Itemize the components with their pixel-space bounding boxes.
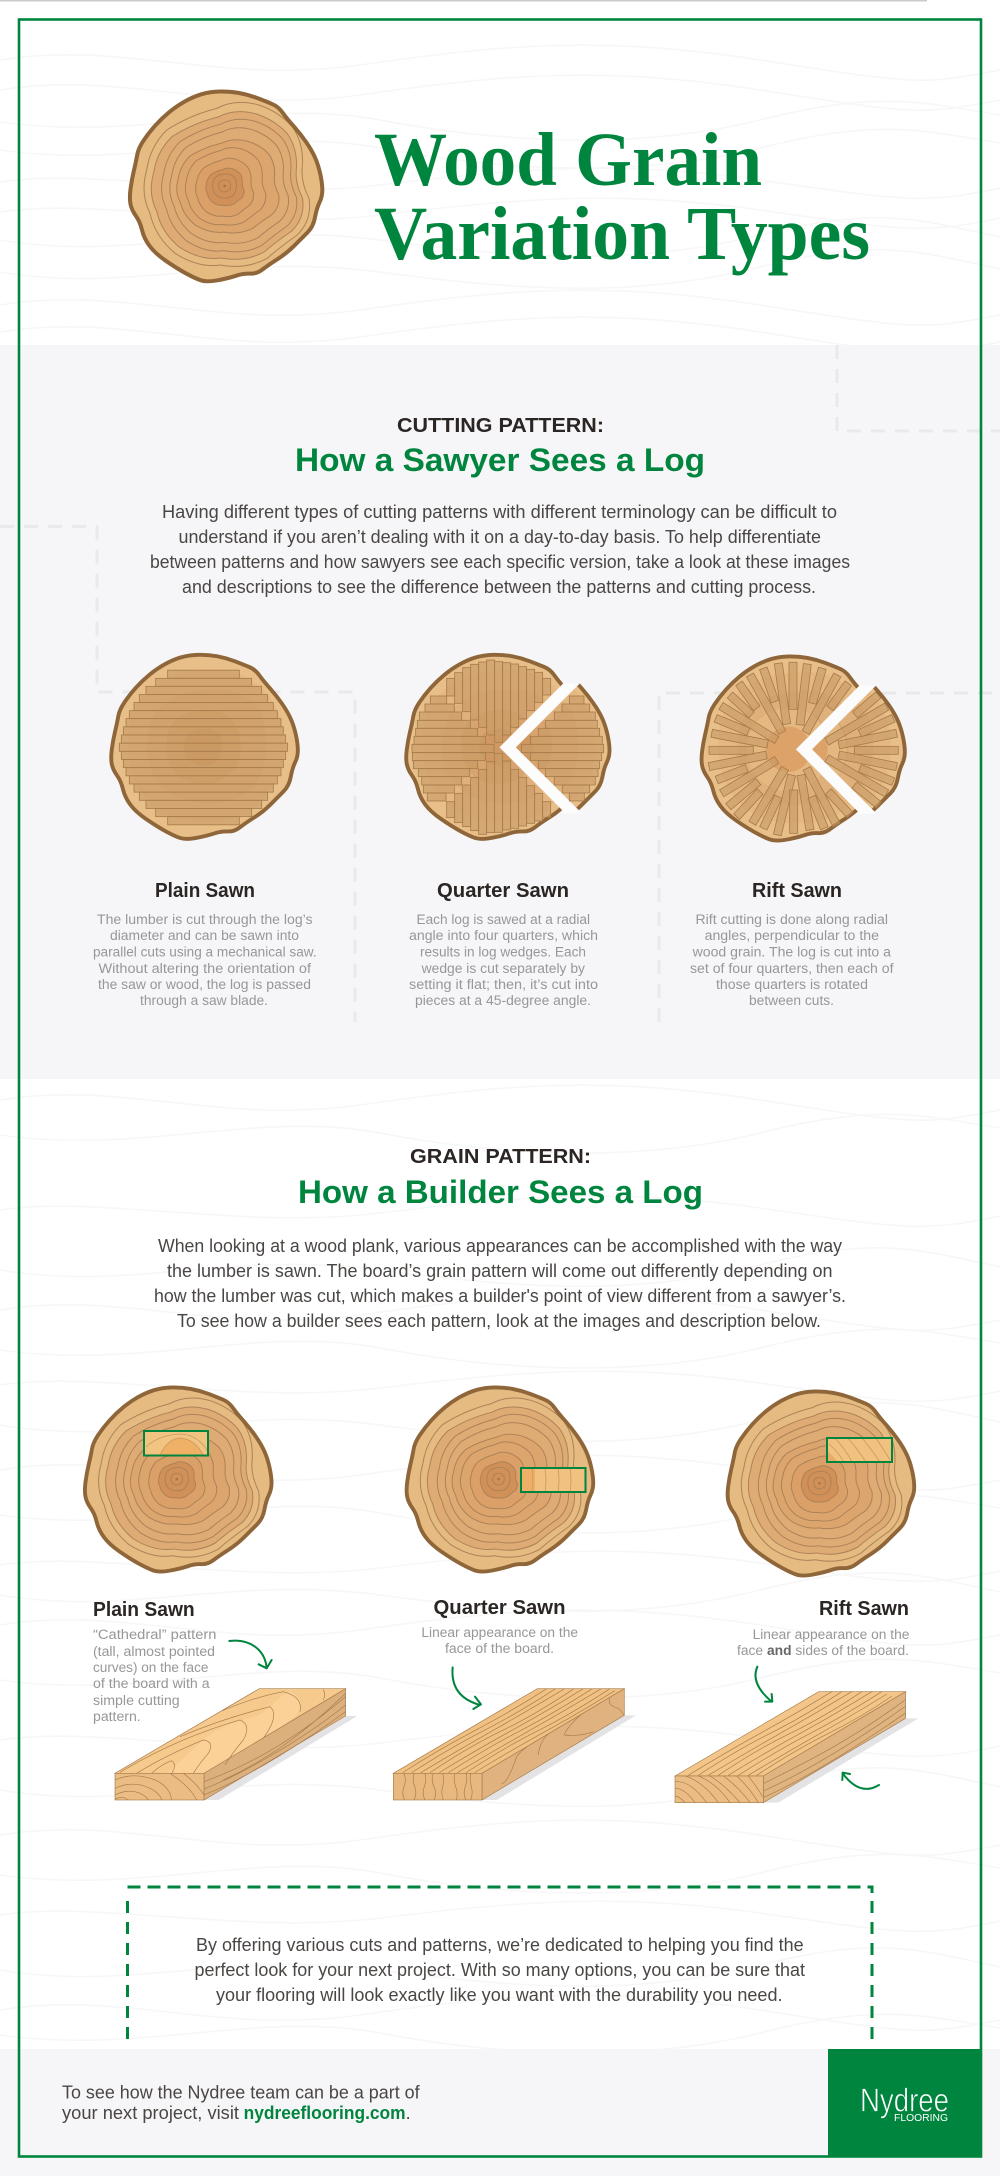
title: Variation Types bbox=[374, 192, 870, 276]
heading and description: quarter sawn grain: Quarter Sawn bbox=[434, 1597, 566, 1619]
text: grain pattern introduction: how the lumber was cut, which makes a builder's point of view different from a sawyer’s. bbox=[154, 1286, 846, 1306]
heading and description: rift sawn cutting: angles, perpendicular to the bbox=[705, 928, 879, 943]
callout: closing message box bbox=[128, 1887, 872, 2042]
heading and description: quarter sawn cutting: pieces at a 45-degree angle. bbox=[415, 993, 591, 1008]
heading and description: rift sawn cutting: Rift Sawn bbox=[752, 880, 842, 902]
heading and description: rift sawn cutting bbox=[690, 880, 894, 1008]
heading and description: quarter sawn cutting bbox=[409, 880, 598, 1008]
heading and description: quarter sawn cutting: Quarter Sawn bbox=[437, 880, 569, 902]
logo: Nydree Flooring: FLOORING bbox=[894, 2113, 948, 2124]
heading and description: plain sawn cutting: Plain Sawn bbox=[155, 880, 255, 902]
heading and description: plain sawn cutting: through a saw blade. bbox=[140, 993, 268, 1008]
logo: Nydree Flooring bbox=[828, 2049, 982, 2158]
icon: quarter sawn log with highlighted board bbox=[407, 1387, 593, 1572]
footer call to action: your next project, visit bbox=[62, 2103, 239, 2123]
section: cutting pattern heading: CUTTING PATTERN: bbox=[397, 415, 604, 437]
heading and description: quarter sawn cutting: wedge is cut separately by bbox=[421, 961, 585, 976]
icon: title log cross-section bbox=[130, 91, 322, 281]
icon: plain sawn log with highlighted board bbox=[85, 1387, 272, 1572]
icon: rift sawn log with highlighted board bbox=[728, 1391, 914, 1576]
chart: plain sawn cutting diagram bbox=[111, 655, 298, 839]
text: cutting pattern introduction: between patterns and how sawyers see each specific version, take a look at these images bbox=[150, 552, 850, 572]
heading and description: plain sawn cutting: The lumber is cut through the log’s bbox=[97, 912, 313, 927]
heading and description: rift sawn cutting: between cuts. bbox=[749, 993, 834, 1008]
heading and description: plain sawn cutting: the saw or wood, the log is passed bbox=[98, 977, 311, 992]
heading and description: rift sawn cutting: wood grain. The log is cut into a bbox=[692, 945, 892, 960]
chart: quarter sawn cutting diagram bbox=[406, 655, 610, 839]
board: rift sawn bbox=[675, 1667, 918, 1803]
title: Wood Grain bbox=[374, 118, 762, 202]
heading and description: quarter sawn cutting: results in log wedges. Each bbox=[420, 945, 586, 960]
title bbox=[374, 118, 870, 276]
heading and description: plain sawn grain: Plain Sawn bbox=[93, 1599, 195, 1621]
heading and description: plain sawn grain: “Cathedral” pattern bbox=[93, 1627, 216, 1642]
footer call to action: nydreeflooring.com bbox=[244, 2103, 406, 2123]
heading and description: plain sawn cutting: diameter and can be sawn into bbox=[110, 928, 299, 943]
board: quarter sawn bbox=[393, 1667, 636, 1800]
panel: cutting pattern background bbox=[0, 345, 1000, 1079]
heading and description: plain sawn cutting bbox=[93, 880, 317, 1008]
footer call to action: To see how the Nydree team can be a part of bbox=[62, 2083, 421, 2103]
logo: Nydree Flooring: Nydree bbox=[860, 2082, 949, 2119]
callout: closing message box: By offering various cuts and patterns, we’re dedicated to helping you find the bbox=[196, 1935, 804, 1955]
heading and description: quarter sawn cutting: angle into four quarters, which bbox=[409, 928, 598, 943]
heading and description: rift sawn grain: Linear appearance on the bbox=[753, 1627, 909, 1642]
section: grain pattern heading bbox=[298, 1146, 703, 1210]
board: plain sawn bbox=[115, 1641, 357, 1800]
heading and description: rift sawn grain: face and sides of the board. bbox=[737, 1643, 909, 1658]
text: grain pattern introduction: the lumber is sawn. The board’s grain pattern will come out differently depending on bbox=[167, 1261, 832, 1281]
text: grain pattern introduction bbox=[154, 1236, 846, 1331]
heading and description: rift sawn cutting: Rift cutting is done along radial bbox=[696, 912, 888, 927]
callout: closing message box: your flooring will look exactly like you want with the durability you need. bbox=[216, 1985, 783, 2005]
text: cutting pattern introduction bbox=[150, 502, 850, 597]
text: cutting pattern introduction: understand if you aren’t dealing with it on a day-to-day basis. To help differentiate bbox=[178, 527, 821, 547]
heading and description: quarter sawn grain: Linear appearance on the bbox=[421, 1625, 578, 1640]
heading and description: plain sawn grain: simple cutting bbox=[93, 1693, 180, 1708]
footer call to action: . bbox=[406, 2103, 411, 2123]
text: grain pattern introduction: To see how a builder sees each pattern, look at the images and description below. bbox=[177, 1311, 821, 1331]
heading and description: quarter sawn cutting: setting it flat; then, it’s cut into bbox=[409, 977, 598, 992]
heading and description: plain sawn cutting: Without altering the orientation of bbox=[98, 961, 311, 976]
heading and description: plain sawn grain: (tall, almost pointed bbox=[93, 1644, 215, 1659]
heading and description: plain sawn grain: curves) on the face bbox=[93, 1660, 208, 1675]
section: grain pattern heading: GRAIN PATTERN: bbox=[410, 1146, 591, 1168]
chart: rift sawn cutting diagram bbox=[702, 656, 905, 841]
heading and description: plain sawn grain: of the board with a bbox=[93, 1676, 210, 1691]
heading and description: plain sawn grain: pattern. bbox=[93, 1709, 141, 1724]
section: cutting pattern heading bbox=[295, 415, 705, 478]
heading and description: rift sawn grain bbox=[737, 1598, 909, 1658]
panel: footer background bbox=[0, 2049, 1000, 2176]
section: grain pattern heading: How a Builder Sees a Log bbox=[298, 1174, 703, 1210]
heading and description: rift sawn cutting: those quarters is rotated bbox=[716, 977, 868, 992]
heading and description: quarter sawn cutting: Each log is sawed at a radial bbox=[416, 912, 590, 927]
callout: closing message box: perfect look for your next project. With so many options, you can be sure that bbox=[194, 1960, 805, 1980]
heading and description: plain sawn grain bbox=[93, 1599, 216, 1724]
heading and description: quarter sawn grain: face of the board. bbox=[445, 1641, 554, 1656]
heading and description: plain sawn cutting: parallel cuts using a mechanical saw. bbox=[93, 945, 317, 960]
footer call to action bbox=[62, 2083, 421, 2123]
text: cutting pattern introduction: Having different types of cutting patterns with different terminology can be difficult to bbox=[162, 502, 837, 522]
heading and description: quarter sawn grain bbox=[421, 1597, 578, 1656]
text: grain pattern introduction: When looking at a wood plank, various appearances can be accomplished with the way bbox=[158, 1236, 842, 1256]
heading and description: rift sawn grain: Rift Sawn bbox=[819, 1598, 909, 1620]
heading and description: rift sawn cutting: set of four quarters, then each of bbox=[690, 961, 894, 976]
text: cutting pattern introduction: and descriptions to see the difference between the patterns and cutting process. bbox=[182, 577, 816, 597]
section: cutting pattern heading: How a Sawyer Sees a Log bbox=[295, 442, 705, 478]
